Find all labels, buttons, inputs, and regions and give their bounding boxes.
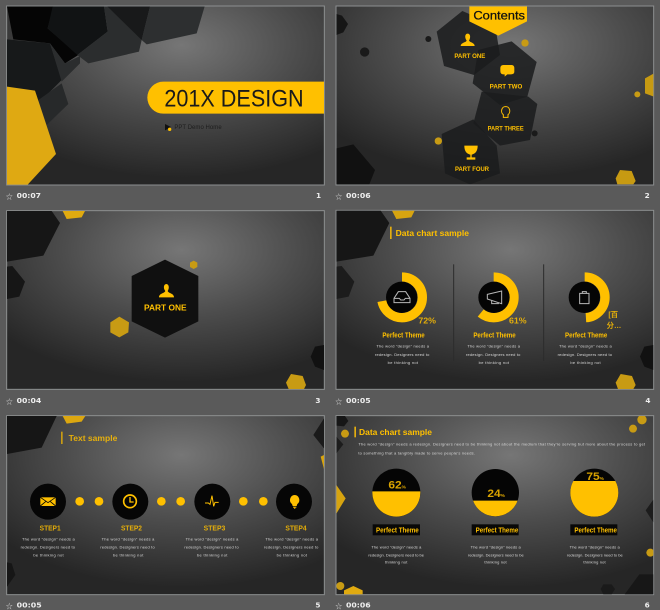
part two label (490, 65, 522, 91)
circle chart 75% (567, 469, 623, 564)
circle chart 62%: thinking not (385, 559, 408, 564)
yellow polygon (7, 87, 56, 185)
panel: slide 5 steps (7, 416, 324, 595)
slide 1 footer: 00:07 (17, 191, 41, 200)
slide 6 footer (335, 601, 650, 610)
part two label: PART TWO (490, 84, 522, 91)
step 4 (264, 484, 319, 558)
step 4: redesign. Designers need to (264, 545, 319, 550)
donut chart 61%: Perfect Theme (473, 333, 516, 340)
donut chart 72%: The word "design" needs a (376, 344, 430, 349)
intro text: to something that a tangibly made to serve people's needs. (358, 450, 475, 455)
slide 6 footer: 00:06 (346, 601, 371, 610)
donut chart third: The word "design" needs a (559, 344, 612, 349)
circle chart 75%: thinking not (583, 559, 607, 564)
background hexagons (336, 415, 654, 594)
part three label: PART THREE (488, 126, 524, 133)
part three label (488, 107, 524, 133)
circle chart 24% (468, 469, 524, 564)
donut chart 61%: redesign. Designers need to (466, 352, 521, 357)
donut chart 72%: 72% (418, 316, 437, 326)
circle chart 62%: The word "design" needs a (371, 545, 422, 550)
slide 4 footer: ☆ (335, 398, 342, 406)
background hexagons (7, 416, 324, 587)
donut chart 61% (466, 277, 527, 365)
intro text: The word "design" needs a redesign. Designers need to be thinking not about the medium that they're serving but more about the process to get (358, 442, 646, 447)
circle chart 75%: Perfect Theme (574, 525, 617, 534)
donut chart 61%: 61% (509, 316, 527, 326)
background hexagons (336, 211, 653, 389)
panel: slide 1 title (7, 6, 324, 185)
step 2: STEP2 (121, 523, 142, 532)
intro text (358, 442, 646, 455)
circle chart 75%: redesign. Designers need to be (567, 552, 623, 557)
heading (61, 432, 118, 444)
donut chart third: be thinking not (570, 360, 602, 365)
step 1 (21, 484, 76, 558)
heading: Text sample (69, 433, 118, 443)
step 2 (100, 484, 155, 558)
slide 3 footer: 00:04 (17, 396, 41, 405)
slide 6 footer: 6 (645, 601, 650, 610)
donut chart third (558, 277, 621, 365)
circle chart 24%: The word "design" needs a (471, 545, 521, 550)
background hexagons (336, 14, 654, 184)
donut chart 61%: be thinking not (479, 360, 510, 365)
slide 3 footer: 3 (315, 396, 320, 405)
step 2: redesign. Designers need to (100, 545, 155, 550)
background hexagons (7, 211, 324, 389)
slide 4 footer: 00:05 (346, 396, 371, 405)
step 1: be thinking not (33, 553, 65, 558)
panel: slide 2 contents (336, 6, 654, 185)
slide 1 footer: ☆ (6, 193, 13, 201)
circle chart 75%: The word "design" needs a (570, 545, 620, 550)
contents banner: Contents (473, 9, 525, 23)
donut chart 72% (375, 277, 437, 365)
slide 3 footer (6, 396, 320, 406)
circle chart 62%: Perfect Theme (376, 525, 419, 534)
circle chart 24%: Perfect Theme (476, 525, 518, 534)
slide 1 footer (6, 191, 321, 201)
donut chart 72%: Perfect Theme (382, 333, 425, 340)
part four label: PART FOUR (455, 166, 489, 173)
step 1: The word "design" needs a (22, 536, 75, 541)
slide 4 footer: 4 (645, 396, 650, 405)
part one label: PART ONE (454, 53, 485, 60)
step 2: be thinking not (113, 553, 144, 558)
heading: Data chart sample (359, 427, 432, 437)
circle chart 24%: thinking not (484, 559, 508, 564)
step 2: The word "design" needs a (102, 536, 155, 541)
circle chart 62%: redesign. Designers need to be (368, 552, 425, 557)
slide 2 footer: 2 (645, 191, 650, 200)
slide 4 footer (335, 396, 650, 406)
donut chart 72%: be thinking not (388, 360, 419, 365)
slide 5 footer: 00:05 (17, 601, 42, 610)
step 4: The word "design" needs a (265, 536, 319, 541)
donut chart third: redesign. Designers need to (558, 352, 613, 357)
donut chart 61%: The word "design" needs a (467, 344, 521, 349)
slide 5 footer: 5 (315, 601, 320, 610)
panel: slide 6 circle charts (336, 415, 654, 595)
panel: slide 4 donut charts (336, 210, 654, 389)
circle chart 24%: 24% (487, 488, 505, 500)
panel: slide 3 part one (7, 211, 324, 389)
step 1: redesign. Designers need to (21, 545, 76, 550)
slide 1 footer: 1 (316, 191, 321, 200)
step 3 (184, 484, 239, 558)
subtitle with play icon: PPT Demo Home (174, 125, 222, 131)
contents banner (469, 6, 527, 36)
circle chart 62%: 62% (388, 479, 406, 491)
slide 2 footer (335, 191, 650, 201)
donut chart third: 分… (607, 321, 621, 330)
title banner: 201X DESIGN (164, 86, 304, 113)
slide 2 footer: ☆ (335, 193, 342, 201)
dark polygon cluster (7, 6, 205, 125)
connector dots (75, 497, 268, 506)
step 3: be thinking not (197, 553, 228, 558)
hexagon: part one (132, 260, 198, 338)
step 4: be thinking not (277, 553, 308, 558)
hexagon: part one: PART ONE (144, 303, 187, 313)
step 1: STEP1 (40, 523, 61, 532)
donut chart third: [百 (608, 310, 618, 319)
overlapping content hexagons (437, 11, 537, 184)
step 4: STEP4 (285, 523, 308, 532)
step 3: The word "design" needs a (186, 536, 239, 541)
slide 3 footer: ☆ (6, 398, 13, 406)
slide 5 footer (6, 601, 320, 610)
circle chart 62% (368, 469, 425, 564)
donut chart third: Perfect Theme (565, 333, 607, 340)
circle chart 75%: 75% (586, 471, 604, 483)
step 3: STEP3 (204, 523, 225, 532)
slide 2 footer: 00:06 (346, 191, 371, 200)
part one label (454, 34, 485, 60)
step 3: redesign. Designers need to (184, 545, 239, 550)
part four label (455, 146, 489, 173)
heading: Data chart sample (396, 228, 469, 238)
circle chart 24%: redesign. Designers need to be (468, 552, 524, 557)
donut chart 72%: redesign. Designers need to (375, 352, 430, 357)
